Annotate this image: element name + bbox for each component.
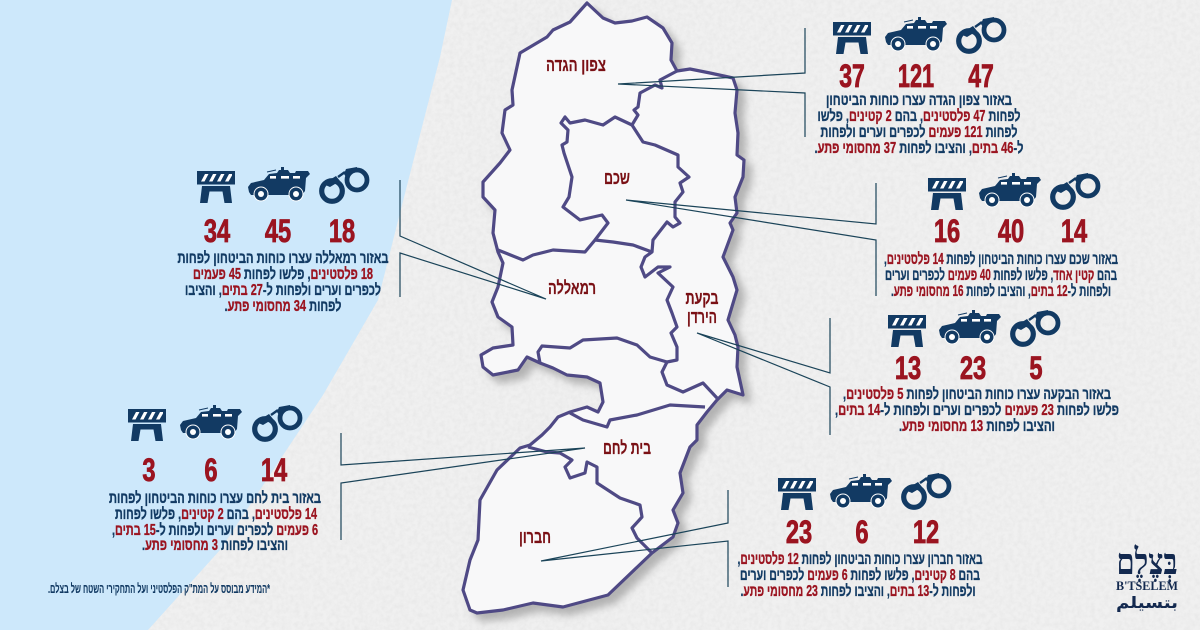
text block: לפחות 47 פלסטינים, בהם 2 קטינים, פלשו <box>818 107 1020 125</box>
text block: באזור רמאללה עצרו כוחות הביטחון לפחות <box>178 249 388 267</box>
region labels <box>519 55 718 547</box>
text block: והציבו לפחות 3 מחסומי פתע. <box>142 536 288 554</box>
panel: Jordan Valley <box>835 310 1119 435</box>
region labels: בקעת <box>686 288 718 308</box>
numbers: 12 <box>913 515 939 550</box>
numbers <box>204 214 355 249</box>
region labels: רמאללה <box>548 278 596 298</box>
text block <box>738 550 982 600</box>
numbers: 14 <box>1061 214 1087 249</box>
leader lines <box>341 28 876 587</box>
text block: 6 פעמים לכפרים וערים ולפחות ל-15 בתים, <box>112 521 318 539</box>
text block: ולפחות ל-13 בתים, והציבו לפחות 23 מחסומי פתע. <box>740 582 976 600</box>
region labels: שכם <box>604 168 630 188</box>
text block: פלשו לפחות 23 פעמים לכפרים וערים ולפחות ל-14 בתים, <box>835 401 1119 419</box>
text block: בהם 8 קטינים, פלשו לפחות 6 פעמים לכפרים וערים <box>740 566 980 584</box>
panel: northern West Bank <box>814 17 1024 157</box>
footnote: *המידע מבוסס על המת"ק הפלסטיני ועל התחקירי השטח של בצלם. <box>48 581 271 596</box>
logo: B'Tselem: בְּצֶלֶם <box>1116 542 1178 583</box>
numbers: 6 <box>204 453 218 488</box>
region labels: בית לחם <box>603 438 651 458</box>
numbers: 16 <box>934 214 960 249</box>
icons: roadblock, vehicle, handcuffs <box>888 310 1058 347</box>
panel: Ramallah <box>178 167 388 315</box>
numbers: 34 <box>204 214 230 249</box>
numbers: 47 <box>968 58 994 94</box>
text block: לפחות 121 פעמים לכפרים וערים ולפחות <box>820 123 1018 141</box>
text block: 14 פלסטינים, בהם 2 קטינים, פלשו לפחות <box>115 505 317 523</box>
numbers: 37 <box>839 58 865 94</box>
text block: בהם קטין אחד, פלשו לפחות 40 פעמים לכפרים וערים <box>885 266 1117 284</box>
numbers: 14 <box>261 453 287 488</box>
numbers <box>934 214 1087 249</box>
numbers: 45 <box>265 214 291 249</box>
text block: לכפרים וערים ולפחות ל-27 בתים, והציבו <box>185 281 381 299</box>
numbers: 121 <box>898 58 934 94</box>
text block <box>109 489 321 554</box>
panel: Nablus <box>884 173 1118 300</box>
numbers: 5 <box>1029 351 1043 386</box>
logo: B'Tselem: B'TSELEM <box>1116 579 1178 593</box>
numbers: 23 <box>786 515 812 550</box>
text block <box>884 250 1118 300</box>
region labels: חברון <box>519 527 551 547</box>
text block <box>178 249 388 315</box>
numbers: 6 <box>855 515 869 550</box>
icons: roadblock, vehicle, handcuffs <box>778 473 949 510</box>
region labels: צפון הגדה <box>546 55 606 75</box>
text block <box>814 92 1024 157</box>
text block: באזור צפון הגדה עצרו כוחות הביטחון <box>826 92 1012 109</box>
text block: ולפחות ל-12 בתים, והציבו לפחות 16 מחסומי פתע. <box>891 282 1111 300</box>
numbers: 13 <box>895 351 921 386</box>
numbers: 23 <box>960 351 986 386</box>
text block: באזור הבקעה עצרו כוחות הביטחון לפחות 5 פלסטינים, <box>843 385 1111 403</box>
text block: והציבו לפחות 13 מחסומי פתע. <box>899 417 1055 435</box>
numbers: 18 <box>329 214 355 249</box>
logo: B'Tselem <box>1116 542 1178 612</box>
icons: roadblock, vehicle, handcuffs <box>197 167 367 203</box>
icons: roadblock, vehicle, handcuffs <box>833 17 1004 54</box>
text block: באזור בית לחם עצרו כוחות הביטחון לפחות <box>109 489 321 507</box>
numbers <box>839 58 994 94</box>
text block: ל-46 בתים, והציבו לפחות 37 מחסומי פתע. <box>814 139 1024 157</box>
panel: Hebron <box>738 473 982 600</box>
numbers: 3 <box>142 453 156 488</box>
text block: 18 פלסטינים, פלשו לפחות 45 פעמים <box>193 265 373 283</box>
text block <box>835 385 1119 435</box>
map: West Bank regions <box>463 3 744 613</box>
text block: באזור חברון עצרו כוחות הביטחון לפחות 12 פלסטינים, <box>738 550 982 568</box>
numbers <box>895 351 1043 386</box>
icons: roadblock, vehicle, handcuffs <box>928 173 1098 210</box>
numbers: 40 <box>998 214 1024 249</box>
text block: לפחות 34 מחסומי פתע. <box>225 297 342 315</box>
logo: B'Tselem: بتسيلم <box>1116 593 1178 612</box>
icons: roadblock, vehicle, handcuffs <box>128 405 300 441</box>
numbers <box>786 515 939 550</box>
numbers <box>142 453 287 488</box>
region labels: הירדן <box>687 307 717 327</box>
panel: Bethlehem <box>109 405 321 554</box>
